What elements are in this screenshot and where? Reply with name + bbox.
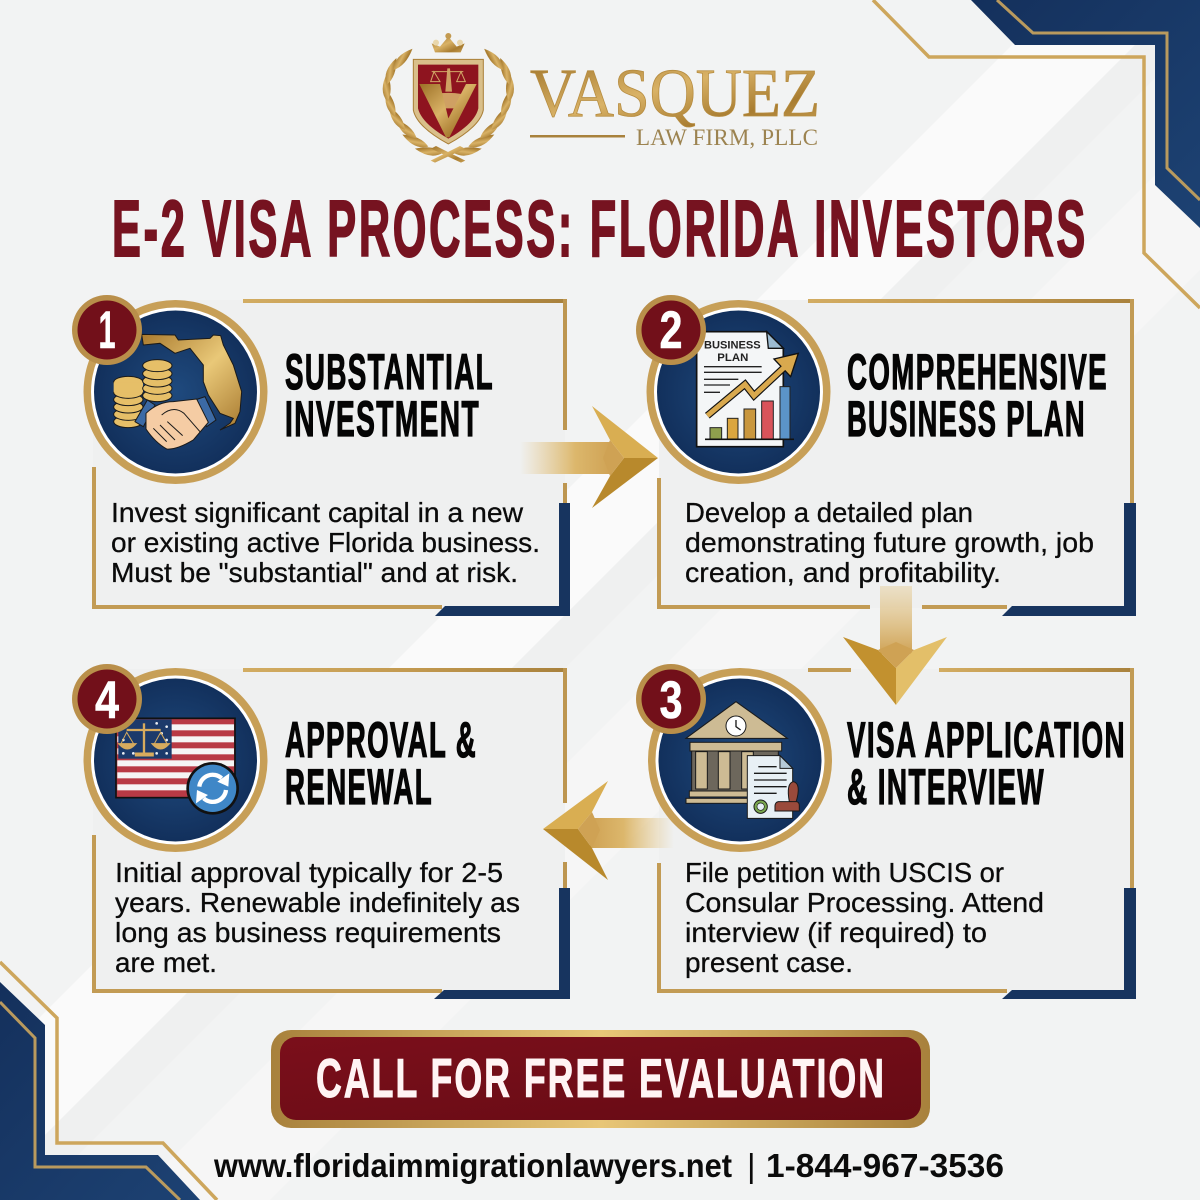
number badge 2: 2 bbox=[660, 301, 682, 360]
description: Consular Processing. Attend bbox=[685, 887, 1044, 918]
heading: SUBSTANTIAL bbox=[285, 344, 494, 400]
number badge 2 bbox=[636, 295, 706, 365]
panel: step 4 approval and renewal bbox=[72, 664, 570, 999]
heading: & INTERVIEW bbox=[847, 759, 1045, 815]
icon: courthouse, document and stamp bbox=[648, 668, 832, 852]
description: years. Renewable indefinitely as bbox=[115, 887, 520, 918]
arrow: step 3 to step 4 bbox=[543, 781, 674, 880]
panel frame bbox=[92, 668, 570, 999]
heading: APPROVAL & bbox=[285, 712, 477, 768]
footer contact line: www.floridaimmigrationlawyers.net bbox=[213, 1147, 732, 1184]
panel: step 2 comprehensive business plan bbox=[636, 295, 1136, 616]
icon: business plan document and growth chart: BUSINESS bbox=[704, 339, 761, 351]
corner: bottom left navy accent bbox=[0, 962, 217, 1200]
icon: business plan document and growth chart: PLAN bbox=[717, 352, 748, 364]
heading: RENEWAL bbox=[285, 759, 433, 815]
heading bbox=[847, 712, 1126, 815]
corner: top right navy accent bbox=[873, 0, 1200, 308]
logo wordmark: VASQUEZ bbox=[530, 55, 820, 131]
icon: american flag with scales and renewal symbol bbox=[84, 668, 268, 852]
description: demonstrating future growth, job bbox=[685, 527, 1094, 558]
panel: step 1 substantial investment bbox=[72, 295, 570, 616]
number badge 4 bbox=[72, 664, 142, 734]
description: Must be "substantial" and at risk. bbox=[111, 557, 518, 588]
call to action button bbox=[271, 1030, 930, 1128]
description: interview (if required) to bbox=[685, 917, 987, 948]
number badge 1 bbox=[72, 295, 142, 365]
heading bbox=[285, 344, 494, 447]
logo subtitle: LAW FIRM, PLLC bbox=[636, 125, 818, 150]
number badge 1: 1 bbox=[98, 301, 116, 360]
heading bbox=[285, 712, 477, 815]
description bbox=[115, 857, 520, 978]
number badge 4: 4 bbox=[95, 671, 119, 730]
panel background bbox=[93, 669, 565, 992]
description: creation, and profitability. bbox=[685, 557, 1001, 588]
panel frame bbox=[657, 668, 1136, 999]
panel frame bbox=[92, 299, 570, 616]
description bbox=[685, 497, 1094, 588]
panel background bbox=[659, 300, 1132, 608]
arrow: step 2 to step 3 bbox=[843, 586, 947, 705]
heading: INVESTMENT bbox=[285, 391, 480, 447]
heading bbox=[847, 344, 1108, 447]
number badge 3: 3 bbox=[660, 671, 682, 730]
description: or existing active Florida business. bbox=[111, 527, 540, 558]
panel: step 3 visa application and interview bbox=[636, 664, 1136, 999]
panel frame bbox=[657, 299, 1136, 616]
panel background bbox=[659, 669, 1132, 992]
logo rule bbox=[530, 135, 625, 138]
description: Develop a detailed plan bbox=[685, 497, 973, 528]
arrow: step 1 to step 2 bbox=[520, 406, 658, 508]
description: Initial approval typically for 2-5 bbox=[115, 857, 503, 888]
icon: business plan document and growth chart bbox=[646, 300, 830, 484]
description: long as business requirements bbox=[115, 917, 501, 948]
footer contact line: | bbox=[747, 1147, 756, 1184]
call to action button: CALL FOR FREE EVALUATION bbox=[316, 1047, 886, 1109]
description: are met. bbox=[115, 947, 217, 978]
number badge 3 bbox=[636, 664, 706, 734]
description: File petition with USCIS or bbox=[685, 857, 1004, 888]
description bbox=[111, 497, 540, 588]
description: Invest significant capital in a new bbox=[111, 497, 524, 528]
footer contact line: 1-844-967-3536 bbox=[766, 1147, 1004, 1184]
logo bbox=[382, 33, 820, 163]
icon: florida map, coins and handshake bbox=[84, 300, 268, 484]
description bbox=[685, 857, 1044, 978]
panel background bbox=[93, 300, 565, 608]
logo emblem bbox=[382, 33, 515, 163]
description: present case. bbox=[685, 947, 853, 978]
